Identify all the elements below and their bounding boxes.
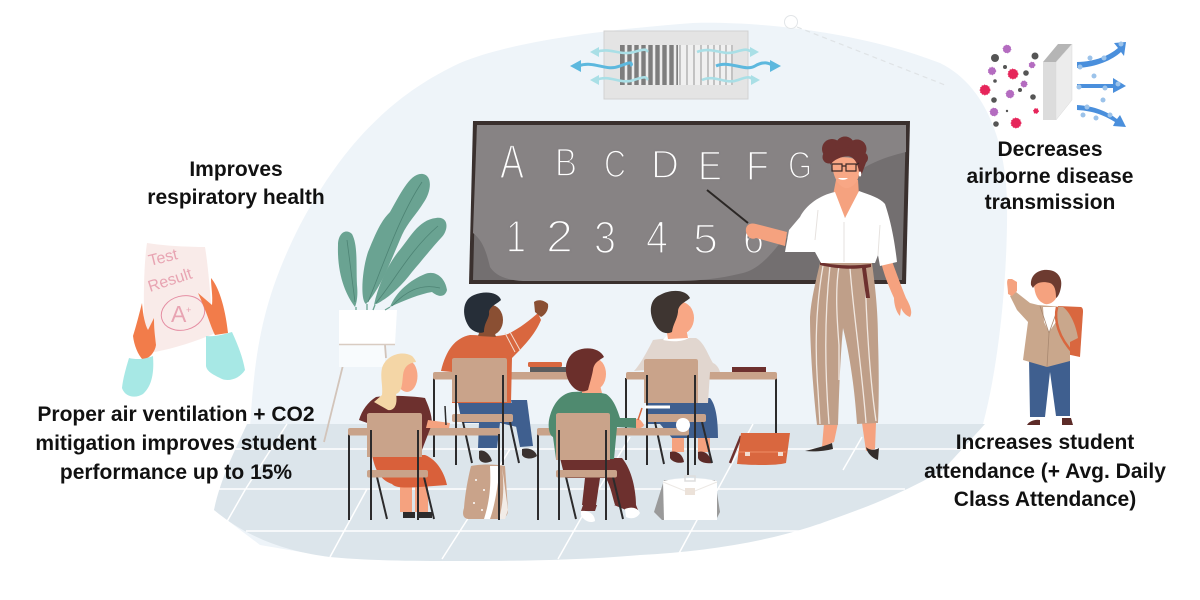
chalk letters — [500, 136, 812, 263]
right arm and hand — [881, 261, 911, 317]
label: student attendance: Increases student — [956, 431, 1134, 454]
chalk letters: 3 — [594, 212, 616, 263]
icon: student waving with backpack — [1007, 270, 1083, 425]
front left table — [348, 428, 500, 520]
student in beige shirt — [634, 291, 720, 465]
fringe — [830, 147, 864, 172]
connector dot and dashed line — [784, 16, 945, 85]
teacher — [707, 136, 911, 460]
label: student performance — [35, 403, 317, 484]
belt — [820, 262, 871, 298]
right hand — [198, 278, 228, 335]
right sleeve — [206, 332, 245, 380]
label: student performance: mitigation improves student — [35, 432, 317, 455]
A+ circle — [157, 291, 209, 335]
chalk letters: 4 — [646, 211, 668, 263]
label: student performance: Proper air ventilation + CO2 — [37, 403, 315, 426]
air vent — [570, 31, 781, 99]
shirt — [785, 191, 897, 266]
legs — [822, 423, 876, 451]
plant — [324, 174, 447, 442]
decorative white dot — [676, 418, 690, 432]
chalk letters: 5 — [693, 215, 718, 262]
icon: air arrows from vent — [578, 50, 774, 81]
striped trousers — [810, 263, 879, 425]
chalk letters: 6 — [743, 215, 764, 262]
label: airborne disease: airborne disease — [967, 165, 1133, 188]
label: airborne disease: Decreases — [997, 138, 1103, 161]
floor — [214, 424, 985, 561]
chalkboard — [469, 121, 910, 284]
background blob — [214, 23, 1007, 561]
left forearm — [746, 223, 787, 246]
neck — [833, 180, 859, 218]
student in green sweater — [549, 348, 644, 522]
white briefcase — [654, 476, 720, 520]
glasses — [832, 163, 859, 171]
face — [832, 157, 859, 188]
label: improves respiratory health: Improves — [189, 158, 283, 181]
label: student attendance: Class Attendance) — [954, 488, 1136, 511]
face — [1034, 282, 1057, 304]
orange satchel bag — [730, 433, 790, 465]
icon: test result held in hands: Test — [147, 246, 180, 270]
backpack — [463, 434, 508, 520]
label: airborne disease: transmission — [985, 191, 1115, 214]
A+ circle: A — [171, 301, 187, 327]
back right table — [626, 372, 777, 460]
raised hand — [1007, 279, 1017, 296]
chalk letters: E — [698, 142, 722, 189]
hair back — [822, 136, 868, 176]
shirt and jacket — [1010, 292, 1078, 367]
hair — [1031, 270, 1061, 298]
student raising hand — [441, 293, 548, 465]
chalk letters: G — [788, 145, 812, 187]
left sleeve — [122, 356, 153, 397]
shoes — [1027, 418, 1073, 425]
chalk letters: 1 — [506, 211, 526, 262]
A+ circle: + — [186, 305, 191, 315]
chalk letters: F — [746, 142, 769, 189]
books on tables — [528, 362, 766, 372]
back left table — [433, 372, 569, 465]
shoes — [805, 443, 879, 460]
chalk letters: D — [651, 143, 679, 187]
trousers — [1029, 358, 1070, 417]
chalk letters: 2 — [546, 211, 573, 262]
backpack — [1057, 306, 1083, 357]
label: student attendance: attendance (+ Avg. Daily — [924, 460, 1166, 483]
label: student attendance — [924, 431, 1166, 511]
icon: test result held in hands — [122, 243, 245, 397]
chalk letters: A — [500, 136, 524, 189]
paper — [144, 243, 218, 352]
left hand — [133, 303, 156, 360]
icon: air filter with particles and arrows — [980, 42, 1126, 128]
label: airborne disease — [967, 138, 1133, 214]
chalk letters: C — [604, 143, 626, 186]
pointer — [707, 190, 748, 223]
label: improves respiratory health: respiratory health — [147, 186, 325, 209]
label: improves respiratory health — [147, 158, 325, 209]
icon: test result held in hands: Result — [146, 265, 195, 296]
blonde student — [359, 353, 450, 520]
chalk letters: B — [555, 141, 577, 185]
label: student performance: performance up to 15% — [60, 461, 292, 484]
front right table — [537, 428, 689, 520]
